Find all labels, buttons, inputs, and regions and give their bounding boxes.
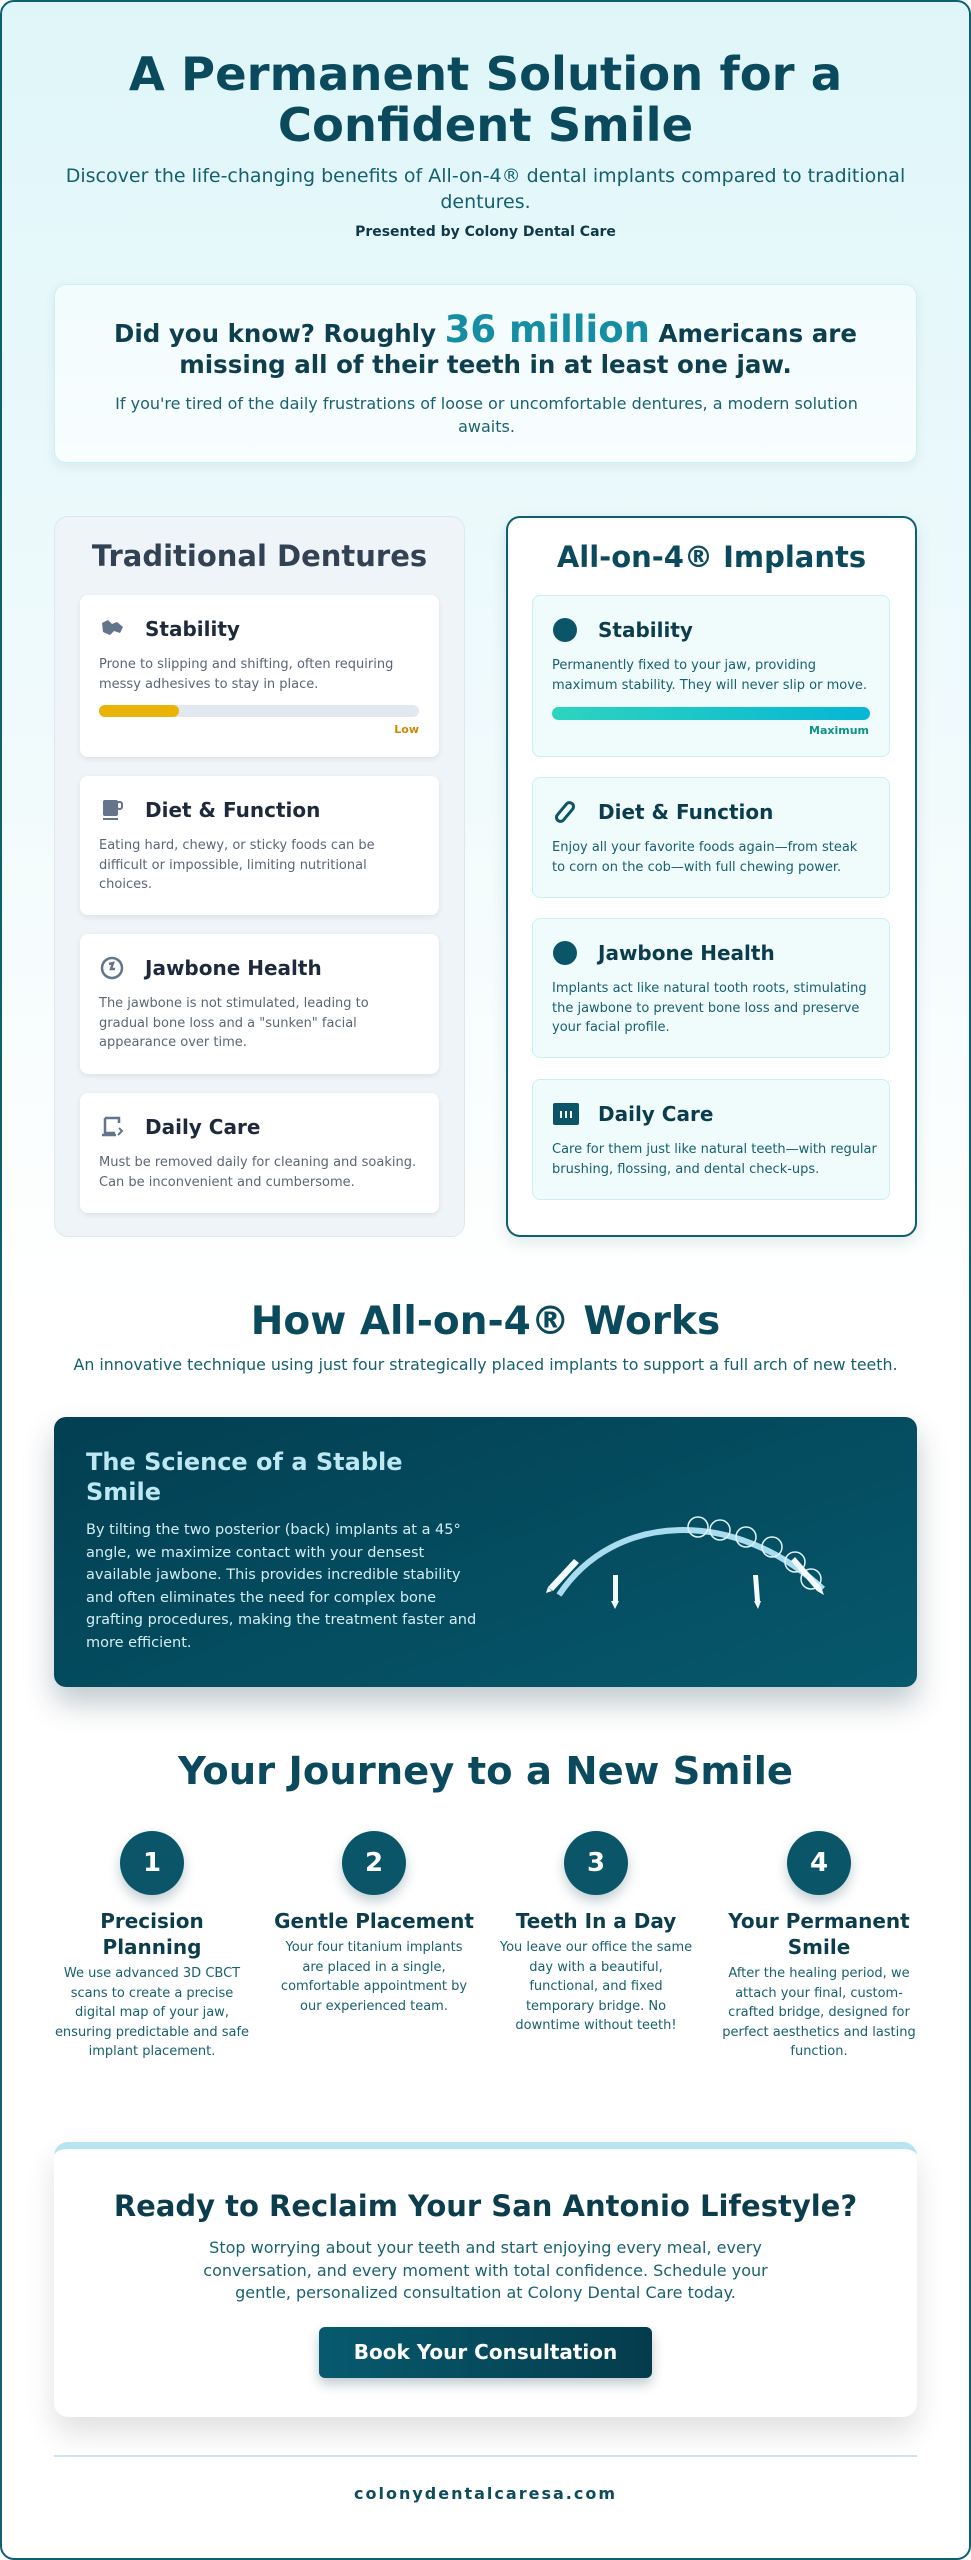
card: daily care: Care for them just like natural teeth—with regular brushing, flossing, and dental check-ups. — [552, 1142, 877, 1176]
card: stability — [80, 595, 439, 757]
panel: call to action: Ready to Reclaim Your San Antonio Lifestyle? — [114, 2189, 857, 2223]
card: diet: Eating hard, chewy, or sticky foods can be difficult or impossible, limiting nutritional choices. — [99, 838, 375, 892]
presenter line: Presented by Colony Dental Care — [355, 224, 616, 240]
card: diet: Diet & Function — [598, 800, 773, 824]
implant: center left — [613, 1575, 618, 1601]
implant: left tilted — [548, 1559, 579, 1591]
step 1: Precision — [100, 1909, 204, 1933]
subtitle: Discover the life-changing benefits of All-on-4® dental implants compared to traditional dentures. — [66, 165, 905, 213]
title: A Permanent Solution for a — [129, 47, 842, 101]
step 3: Teeth In a Day — [516, 1909, 676, 1933]
step 4 — [722, 1831, 916, 2059]
step 1: 1 — [143, 1848, 161, 1878]
footer url: colonydentalcaresa.com — [354, 2484, 617, 2503]
callout: did you know: missing all of their teeth in at least one jaw. — [179, 350, 792, 379]
step 4: After the healing period, we attach your final, custom-crafted bridge, designed for perfect aesthetics and lasting function. — [722, 1966, 916, 2059]
card: stability: Stability — [145, 617, 240, 641]
card: jawbone — [532, 918, 890, 1058]
card: stability: Permanently fixed to your jaw, providing maximum stability. They will never slip or move. — [552, 658, 867, 692]
step 2: Gentle Placement — [274, 1909, 474, 1933]
card: daily care — [532, 1079, 890, 1200]
step 2: Your four titanium implants are placed in a single, comfortable appointment by our experienced team. — [281, 1940, 467, 2014]
step 1 — [55, 1831, 249, 2059]
card: stability: Maximum — [809, 724, 869, 737]
step 3: 3 — [587, 1848, 605, 1878]
panel: science: The Science of a Stable Smile — [86, 1448, 403, 1506]
button: Book Your Consultation — [354, 2340, 617, 2364]
heading: journey: Your Journey to a New Smile — [178, 1749, 793, 1794]
panel: call to action — [54, 2142, 917, 2417]
card: jawbone — [80, 934, 439, 1074]
card: stability — [532, 595, 890, 757]
title — [129, 47, 842, 152]
card: stability: Low — [394, 723, 419, 736]
card: diet: Enjoy all your favorite foods again—from steak to corn on the cob—with full chewing power. — [552, 840, 857, 874]
card: jawbone: Implants act like natural tooth roots, stimulating the jawbone to prevent bone loss and preserve your facial profile. — [552, 981, 867, 1035]
step 1: Planning — [103, 1935, 201, 1959]
card: daily care: Daily Care — [598, 1102, 713, 1126]
card: diet: Diet & Function — [145, 798, 320, 822]
panel: all-on-4 implants — [506, 516, 917, 1237]
card: diet — [80, 776, 439, 915]
implant: center right — [753, 1575, 760, 1601]
step 4: Smile — [788, 1935, 850, 1959]
panel: all-on-4 implants: All-on-4® Implants — [557, 540, 866, 574]
callout: did you know: Did you know? Roughly 36 million Americans are — [114, 308, 857, 351]
callout: did you know — [54, 284, 917, 463]
card: stability: Prone to slipping and shifting, often requiring messy adhesives to stay in place. — [99, 657, 393, 692]
heading: how all-on-4 works: How All-on-4® Works — [251, 1299, 720, 1344]
implant: right tilted — [791, 1557, 821, 1591]
subheading: An innovative technique using just four strategically placed implants to support a full arch of new teeth. — [74, 1355, 897, 1374]
step 1: We use advanced 3D CBCT scans to create a precise digital map of your jaw, ensuring predictable and safe implant placement. — [55, 1966, 249, 2059]
panel: traditional dentures — [54, 516, 465, 1237]
card: diet — [532, 777, 890, 898]
card: daily care: Must be removed daily for cleaning and soaking. Can be inconvenient and cumbersome. — [99, 1155, 416, 1190]
card: jawbone: Jawbone Health — [598, 941, 775, 965]
panel: science: By tilting the two posterior (back) implants at a 45° angle, we maximize contact with your densest available jawbone. This provides incredible stability and often eliminates the need for complex bone grafting procedures, making the treatment faster and more efficient. — [86, 1522, 476, 1651]
button — [319, 2327, 652, 2378]
card: stability: Stability — [598, 618, 693, 642]
panel: science — [54, 1417, 917, 1687]
card: jawbone: The jawbone is not stimulated, leading to gradual bone loss and a "sunken" facial appearance over time. — [99, 996, 369, 1050]
title: Confident Smile — [278, 98, 693, 152]
step 4: 4 — [810, 1848, 828, 1878]
step 2 — [274, 1831, 474, 2014]
panel: traditional dentures: Traditional Dentures — [92, 539, 427, 573]
card: daily care: Daily Care — [145, 1115, 260, 1139]
panel: call to action: Stop worrying about your teeth and start enjoying every meal, every conversation, and every moment with total confidence. Schedule your gentle, personalized consultation at Colony Dental Care today. — [203, 2238, 768, 2302]
step 3: You leave our office the same day with a beautiful, functional, and fixed temporary bridge. No downtime without teeth! — [500, 1940, 692, 2033]
card: daily care — [80, 1093, 439, 1213]
step 4: Your Permanent — [728, 1909, 910, 1933]
step 3 — [500, 1831, 692, 2033]
step 2: 2 — [365, 1848, 383, 1878]
callout: did you know: If you're tired of the daily frustrations of loose or uncomfortable dentures, a modern solution awaits. — [115, 394, 858, 436]
card: jawbone: Jawbone Health — [145, 956, 322, 980]
diagram: arch with implants — [546, 1516, 825, 1609]
